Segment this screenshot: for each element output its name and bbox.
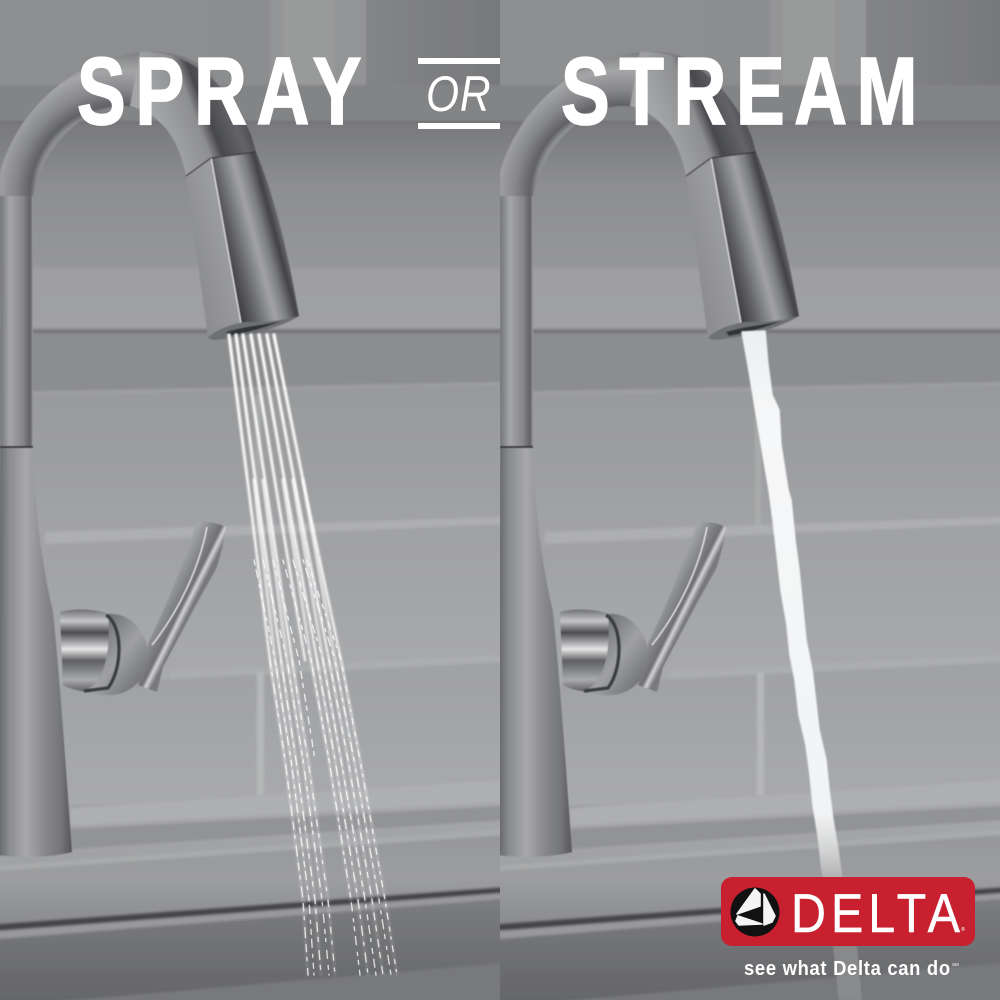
kitchen scene with faucet, spray mode: [0, 0, 503, 1000]
heading: spray: SPRAY: [77, 38, 361, 145]
icon: Delta triangle mark: [730, 888, 780, 936]
heading: or with rules: OR: [426, 66, 491, 122]
wordmark: DELTA: [791, 882, 960, 944]
tagline: see what Delta can do: [744, 958, 950, 980]
logo: Delta: [721, 877, 975, 946]
registered mark: ®: [961, 926, 965, 933]
water stream: [742, 331, 862, 1000]
water spray: [229, 335, 397, 975]
heading: or with rules: [418, 58, 500, 129]
panel: stream faucet: [497, 0, 1000, 1000]
service mark: SM: [952, 962, 959, 967]
heading: stream: STREAM: [561, 38, 917, 145]
kitchen scene with faucet, stream mode: [497, 0, 1000, 1000]
panel: spray faucet: [0, 0, 503, 1000]
